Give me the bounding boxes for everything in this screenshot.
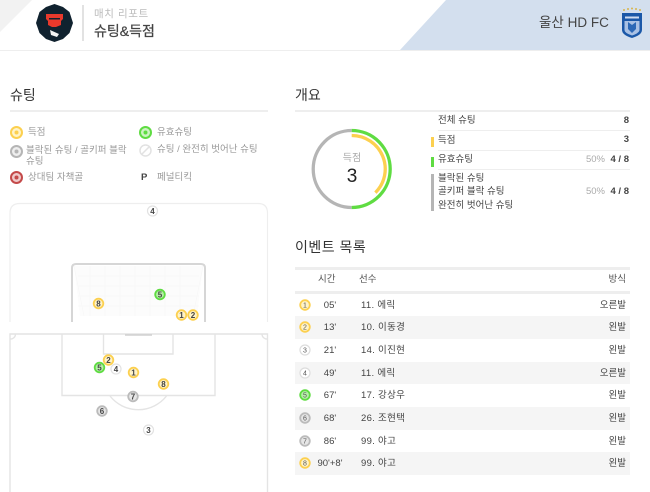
event row 6: 왼발 — [609, 413, 626, 424]
legend: P — [141, 172, 147, 183]
event row 1: 1 — [303, 302, 307, 309]
stat: blocked and off target: 50% — [586, 186, 605, 197]
event row 4: 4 — [303, 370, 307, 377]
event row 8: 8 — [303, 461, 307, 468]
heading: shots: 슈팅 — [10, 87, 36, 103]
event row 4: 11. 에릭 — [361, 368, 395, 379]
event row 7: 99. 야고 — [361, 436, 396, 447]
shot marker 3: 3 — [146, 426, 151, 435]
stat: blocked and off target: 4 / 8 — [610, 186, 629, 197]
event row 1: 11. 에릭 — [361, 300, 395, 310]
event row 2: 2 — [303, 324, 307, 332]
table header — [318, 274, 626, 285]
table header: 방식 — [609, 274, 626, 285]
event row 8: 왼발 — [609, 458, 626, 469]
label: match report: 매치 리포트 — [94, 8, 149, 20]
table header: 시간 — [318, 274, 335, 285]
shot marker 4 — [148, 206, 158, 216]
stat: shots on target: 50% — [586, 154, 605, 165]
team name: 울산 HD FC — [539, 15, 609, 30]
event row 1 — [299, 299, 626, 311]
event row 4: 49' — [324, 368, 336, 379]
event row 6: 68' — [324, 413, 336, 424]
event row 3: 3 — [303, 348, 307, 354]
shot marker 7: 7 — [131, 392, 136, 401]
event row 3 — [300, 344, 626, 356]
shot marker 8: 8 — [96, 299, 101, 308]
stat: total shots — [438, 114, 629, 126]
stat: blocked and off target: 골키퍼 블락 슈팅 — [438, 186, 504, 197]
legend: off target: 슈팅 / 완전히 벗어난 슈팅 — [157, 144, 258, 155]
legend: blocked: 블락된 슈팅 / 골키퍼 블락 — [26, 145, 127, 156]
shot marker 6 — [97, 406, 107, 416]
legend: own goal — [10, 171, 83, 184]
heading: event list: 이벤트 목록 — [295, 239, 366, 255]
event row 2: 왼발 — [609, 322, 626, 333]
event row 3: 21' — [324, 345, 336, 356]
stat: shots on target — [431, 154, 629, 167]
event row 7: 7 — [303, 438, 307, 445]
shot marker 1: 1 — [179, 311, 184, 320]
shot marker 5: 5 — [97, 363, 102, 372]
stat: total shots: 전체 슈팅 — [438, 115, 476, 126]
goal view panel — [10, 203, 268, 322]
stat: blocked and off target — [431, 172, 629, 211]
shot marker 8 — [94, 299, 103, 308]
shot marker 7 — [128, 392, 138, 401]
shot marker 3 — [144, 425, 154, 435]
event row 4 — [295, 362, 630, 384]
shot marker 2 — [104, 355, 113, 365]
icon: app logo — [36, 4, 73, 42]
shot marker 4: 4 — [150, 207, 155, 216]
shot marker 4 — [111, 364, 121, 374]
shot marker 6: 6 — [100, 407, 105, 416]
stat: total shots: 8 — [624, 115, 629, 126]
event row 2: 13' — [324, 322, 336, 333]
shot marker 1: 1 — [131, 368, 136, 377]
legend: blocked — [10, 144, 127, 167]
event row 5: 67' — [324, 390, 336, 401]
table header: 선수 — [359, 274, 376, 285]
legend: own goal: 상대팀 자책골 — [28, 172, 83, 183]
stat: shots on target: 유효슈팅 — [438, 154, 473, 165]
event row 6: 6 — [303, 416, 307, 422]
legend: shot on target: 유효슈팅 — [157, 127, 192, 138]
legend: shot on target — [139, 126, 192, 139]
event row 6 — [295, 407, 630, 430]
shot marker 5 — [95, 363, 104, 372]
title: 슈팅&득점 — [94, 23, 155, 39]
event row 8: 99. 야고 — [361, 458, 396, 469]
goal net — [72, 264, 205, 322]
event row 5: 17. 강상우 — [361, 390, 405, 401]
event row 7 — [299, 435, 626, 447]
legend: goal: 득점 — [28, 127, 45, 138]
shot marker 2: 2 — [191, 311, 196, 320]
pitch — [9, 333, 268, 492]
shot marker 5: 5 — [158, 290, 163, 299]
legend: off target — [139, 144, 258, 157]
event row 6: 26. 조현택 — [361, 413, 405, 424]
event row 5 — [299, 389, 626, 401]
event row 1: 05' — [324, 300, 336, 310]
shot marker 1 — [177, 310, 186, 320]
icon: team crest — [622, 8, 642, 38]
legend: penalty — [141, 172, 192, 183]
shot marker 8 — [159, 379, 168, 389]
donut chart: 3 — [347, 166, 357, 187]
shot marker 2: 2 — [106, 356, 111, 365]
stat: blocked and off target: 완전히 벗어난 슈팅 — [438, 200, 513, 211]
legend — [10, 126, 258, 184]
stat: goals: 득점 — [438, 135, 455, 146]
event row 2: 10. 이동경 — [361, 322, 405, 333]
event row 8 — [295, 452, 630, 475]
shot marker 1 — [129, 368, 138, 377]
event row 2 — [295, 316, 630, 339]
stat: goals — [431, 134, 629, 147]
donut chart — [312, 128, 392, 210]
stat: blocked and off target: 블락된 슈팅 — [438, 173, 484, 184]
shot marker 4: 4 — [114, 365, 119, 374]
stat: goals: 3 — [624, 134, 629, 145]
event row 5: 5 — [303, 393, 307, 400]
event row 8: 90'+8' — [317, 458, 343, 469]
shot marker 2 — [188, 310, 198, 320]
legend: penalty: 페널티킥 — [157, 172, 192, 183]
legend: goal — [10, 126, 45, 139]
stat: shots on target: 4 / 8 — [610, 154, 629, 165]
shot marker 8: 8 — [161, 380, 166, 389]
event row 4: 오른발 — [600, 368, 626, 379]
event row 7: 86' — [324, 436, 336, 447]
event row 5: 왼발 — [609, 390, 626, 401]
header band — [0, 0, 650, 51]
event row 1: 오른발 — [600, 300, 626, 310]
event row 3: 왼발 — [609, 345, 626, 356]
header divider — [82, 5, 84, 41]
heading: overview: 개요 — [295, 87, 321, 103]
shot marker 5 — [155, 290, 165, 299]
event row 3: 14. 이진현 — [361, 345, 405, 356]
legend: blocked: 슈팅 — [26, 156, 43, 167]
event row 7: 왼발 — [609, 436, 626, 447]
donut chart: 득점 — [343, 152, 361, 164]
